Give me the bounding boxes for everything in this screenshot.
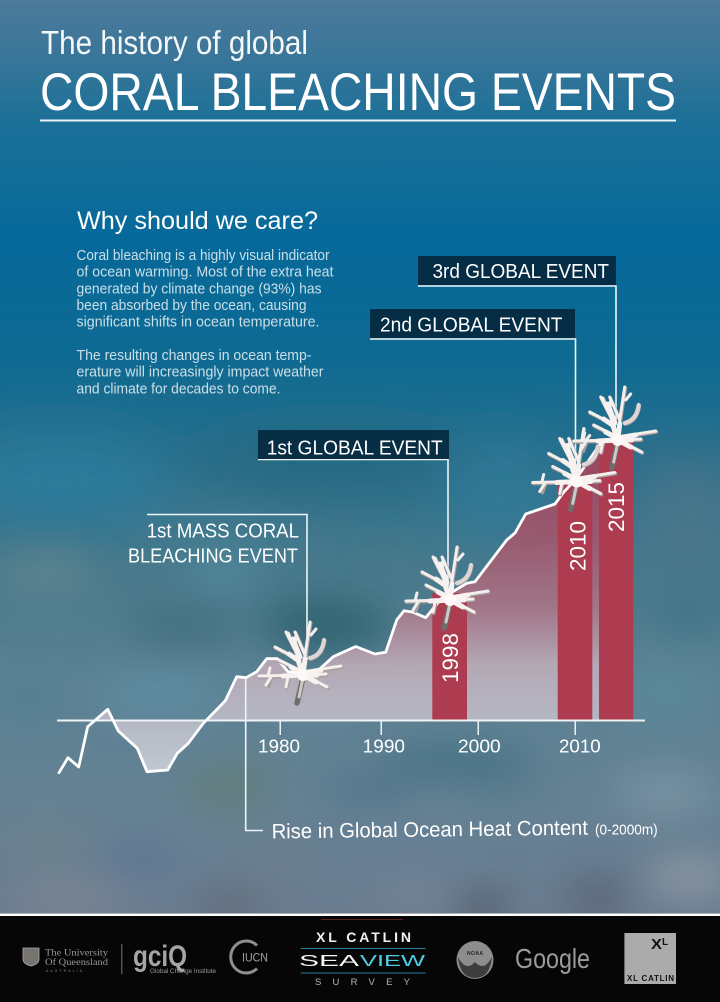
axis year labels: 1980 (258, 736, 300, 756)
rotated year labels in bars (438, 482, 629, 683)
callout depth note: (0-2000m) (595, 822, 658, 838)
label: 1st mass coral bleaching event (128, 520, 299, 568)
paragraph 2: and climate for decades to come. (76, 381, 280, 397)
callout: rise in global ocean heat content (246, 678, 658, 843)
footer band (0, 913, 720, 1002)
label: 1st mass coral bleaching event: BLEACHING EVENT (128, 546, 298, 568)
rotated year labels in bars: 1998 (438, 633, 463, 683)
logo: IUCN: IUCN (242, 950, 268, 964)
logo: IUCN (231, 941, 268, 973)
logo: gciQ Global Change Institute: gciQ (133, 940, 187, 973)
logo: gciQ Global Change Institute: Global Change Institute (150, 968, 216, 975)
paragraph 1: been absorbed by the ocean, causing (76, 298, 306, 314)
logo: XL Catlin Seaview Survey: SURVEY (315, 977, 411, 988)
text block: why should we care (76, 207, 334, 397)
logo: NOAA: NOAA (467, 951, 483, 957)
coral icon: first mass bleaching (259, 622, 342, 703)
logo: XL Catlin: L (662, 937, 668, 948)
coral icon: 2010 (533, 428, 615, 510)
coral icon: 1998 (406, 547, 489, 628)
logo: NOAA (456, 941, 494, 979)
paragraph 2 (76, 348, 324, 397)
heat content line (59, 442, 602, 773)
logo: XL Catlin: X (651, 936, 662, 953)
callout leader (246, 678, 263, 830)
paragraph 1: significant shifts in ocean temperature. (76, 315, 320, 331)
title (40, 24, 676, 122)
axis year labels: 1990 (363, 736, 405, 756)
chart: rise in global ocean heat content (57, 286, 656, 773)
label: 3rd global event: 3rd GLOBAL EVENT (432, 261, 609, 283)
title line 1: The history of global (41, 24, 308, 61)
logo: XL Catlin Seaview Survey: XL CATLIN (316, 929, 411, 945)
logo: University of Queensland (23, 948, 109, 973)
logo: XL Catlin Seaview Survey: SEA (299, 953, 360, 970)
subheading: Why should we care? (77, 207, 318, 235)
rotated year labels in bars: 2015 (604, 482, 629, 532)
paragraph 1 (76, 248, 334, 331)
coral icon: 2015 (574, 387, 656, 468)
logo divider (121, 944, 122, 974)
logo: Google: Google (515, 943, 590, 974)
crest (23, 948, 39, 966)
bar: 1998 event (432, 593, 467, 720)
axis year labels: 2010 (559, 736, 601, 756)
logo: University of Queensland: The University (45, 948, 109, 958)
area under heat content line (96, 442, 602, 772)
logo: University of Queensland: AUSTRALIA (46, 969, 83, 973)
leader lines to events (147, 286, 616, 660)
axis year labels: 2000 (458, 736, 501, 756)
label: 1st mass coral bleaching event: 1st MASS CORAL (147, 520, 299, 542)
axis year labels (258, 736, 601, 756)
paragraph 2: erature will increasingly impact weather (76, 365, 324, 381)
rotated year labels in bars: 2010 (566, 521, 590, 571)
callout text: Rise in Global Ocean Heat Content (271, 817, 588, 843)
paragraph 1: Coral bleaching is a highly visual indicator (76, 248, 330, 264)
label: 3rd global event (418, 256, 616, 285)
x axis (57, 720, 645, 735)
logo: University of Queensland: Of Queensland (45, 957, 109, 967)
logo: XL Catlin (624, 933, 676, 984)
label: 2nd global event: 2nd GLOBAL EVENT (380, 314, 562, 336)
title underline (40, 120, 676, 122)
logo: XL Catlin Seaview Survey (299, 919, 426, 988)
logo: XL Catlin Seaview Survey: VIEW (360, 953, 426, 970)
paragraph 1: of ocean warming. Most of the extra heat (76, 265, 334, 281)
paragraph 2: The resulting changes in ocean temp- (76, 348, 312, 364)
logo: XL Catlin: XL CATLIN (627, 974, 674, 983)
label: 1st global event: 1st GLOBAL EVENT (267, 437, 443, 459)
paragraph 1: generated by climate change (93%) has (76, 281, 322, 297)
bar: 2010 event (558, 483, 592, 720)
bar: 2015 event (599, 440, 633, 720)
